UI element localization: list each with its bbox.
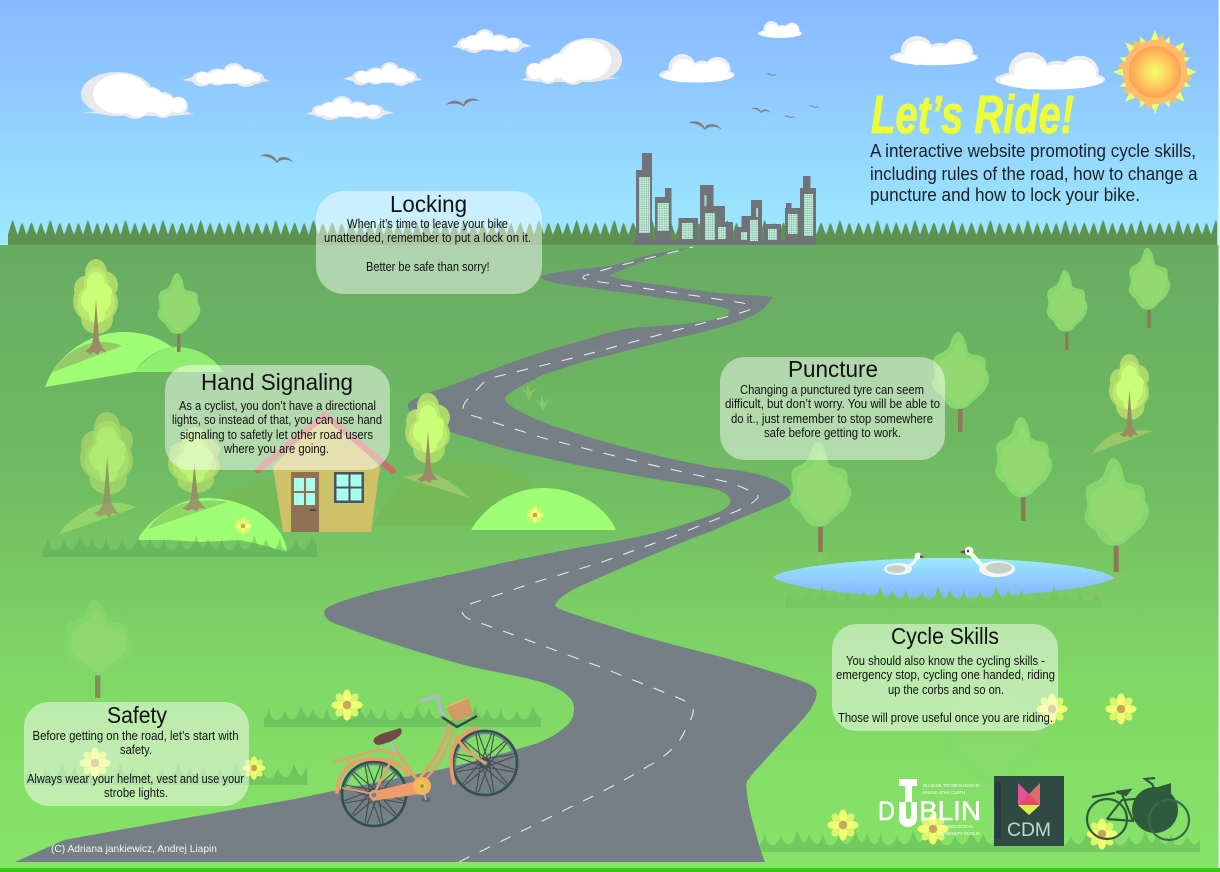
roadside tufts — [519, 384, 1127, 606]
pond with swans — [773, 547, 1114, 608]
panel: safety — [24, 702, 249, 806]
panel: cycle skills: You should also know the cycling skills - — [846, 653, 1045, 668]
sky — [0, 0, 1220, 246]
city skyline — [634, 153, 816, 246]
logo: TU Dublin: TECHNOLOGICAL — [937, 824, 973, 829]
grass strips — [25, 535, 1200, 852]
panel: hand signaling — [165, 365, 390, 470]
panel: hand signaling: Hand Signaling — [201, 369, 353, 395]
panel: safety: Safety — [107, 702, 167, 728]
intro text: puncture and how to lock your bike. — [870, 184, 1140, 205]
birds — [260, 73, 820, 163]
panel: hand signaling: As a cyclist, you don’t have a directional — [179, 398, 376, 413]
back hills — [45, 332, 1153, 552]
logo: TU Dublin: OLLSCOIL TEICNEOLAÍOCHTA — [923, 782, 981, 788]
panel: hand signaling: signaling to safetly let other road users — [180, 427, 373, 442]
ground — [0, 245, 1220, 868]
icon: bicycle — [334, 696, 517, 826]
panel: puncture — [720, 356, 945, 460]
panel: puncture: Changing a punctured tyre can seem — [740, 382, 924, 397]
panel: locking: Better be safe than sorry! — [366, 259, 490, 274]
copyright credit: (C) Adriana jankiewicz, Andrej Liapin — [51, 843, 217, 855]
panel: cycle skills — [832, 623, 1058, 731]
panel: locking: unattended, remember to put a lock on it. — [324, 230, 531, 245]
panel: hand signaling: lights, so instead of that, you can use hand — [172, 412, 382, 427]
panel: safety: safety. — [120, 742, 152, 757]
trees — [64, 248, 1170, 783]
intro text — [870, 140, 1198, 205]
logo: TU Dublin: UNIVERSITY DUBLIN — [937, 831, 980, 836]
panel: safety: Before getting on the road, let’s start with — [32, 728, 238, 743]
road — [15, 247, 817, 862]
logo: dark bicycle — [1087, 778, 1189, 840]
intro text: A interactive website promoting cycle skills, — [870, 140, 1196, 161]
logo: TU Dublin: D — [878, 796, 895, 826]
house — [258, 412, 393, 532]
panel: locking: Locking — [390, 191, 467, 217]
panel: cycle skills: emergency stop, cycling one handed, riding — [836, 667, 1055, 682]
logo: TU Dublin — [878, 779, 981, 836]
panel: locking — [316, 191, 542, 294]
panel: hand signaling: where you are going. — [223, 441, 329, 456]
panel: puncture: do it., just remember to stop somewhere — [731, 411, 933, 426]
panel: cycle skills: up the corbs and so on. — [888, 682, 1004, 697]
distant tree line — [8, 220, 1217, 246]
icon: small swan — [884, 553, 925, 575]
panel: safety: Always wear your helmet, vest and use your — [27, 771, 245, 786]
panel: locking: When it’s time to leave your bike — [347, 216, 508, 231]
clouds — [81, 21, 1105, 120]
icon: sun — [1113, 30, 1197, 114]
flowers — [80, 506, 1136, 850]
panel: puncture: difficult, but don’t worry. You will be able to — [725, 396, 940, 411]
panel: puncture: Puncture — [788, 356, 878, 382]
panel: safety: strobe lights. — [104, 785, 168, 800]
logo: TU Dublin: BLIN — [919, 796, 981, 826]
intro text: including rules of the road, how to change a — [870, 163, 1198, 184]
panel: puncture: safe before getting to work. — [764, 425, 901, 440]
panel: cycle skills: Those will prove useful once you are riding. — [838, 710, 1053, 725]
panel: cycle skills: Cycle Skills — [891, 623, 999, 649]
logo: CDM — [994, 776, 1064, 846]
title: Let’s Ride! — [871, 85, 1074, 145]
logo: CDM: CDM — [1007, 819, 1051, 841]
icon: large swan — [959, 547, 1015, 577]
logo: TU Dublin: BHAILE ÁTHA CLIATH — [923, 789, 965, 795]
